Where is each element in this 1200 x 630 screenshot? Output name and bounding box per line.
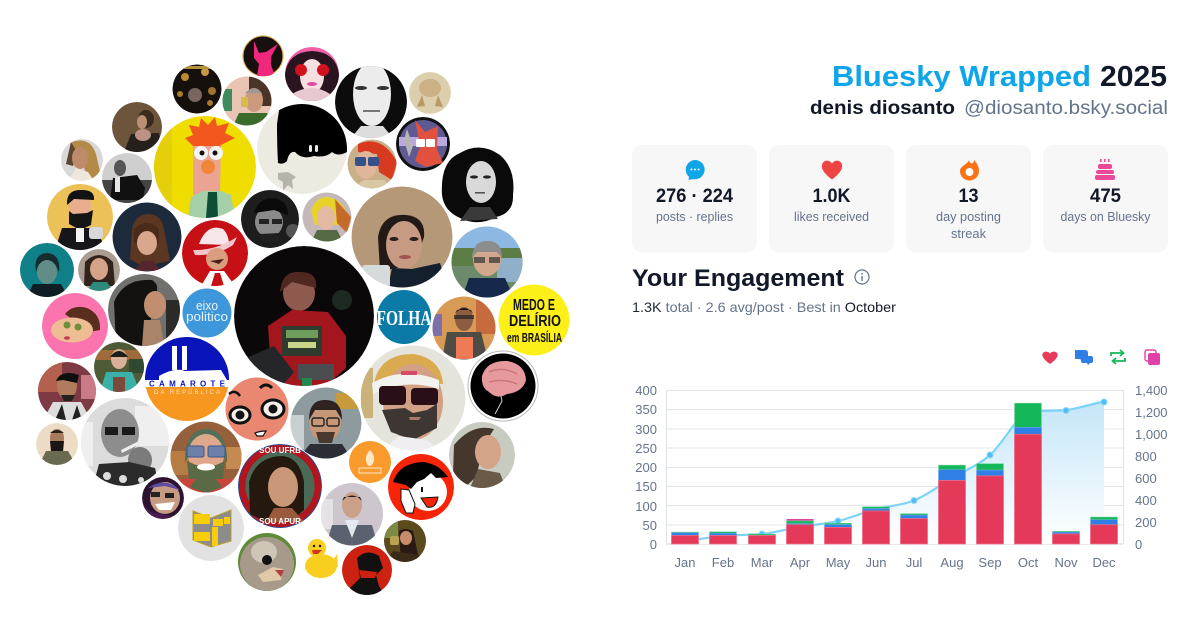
avatar: bald bearded man [36, 423, 78, 465]
stat card: likes received [769, 145, 894, 252]
month labels: Jun [866, 555, 886, 570]
avatar: pink cartoon [42, 293, 108, 359]
stat card: day posting streak: streak [951, 226, 986, 241]
avatar: Folha logo [376, 290, 432, 344]
avatar: black and white woman [335, 62, 407, 138]
avatar: rubber duck [305, 539, 338, 578]
avatar: greyscale smoking man [81, 398, 169, 486]
avatar: woman with wavy hair [449, 422, 515, 488]
icon: chat bubble [686, 160, 705, 180]
heading: Your Engagement: Your Engagement [632, 265, 844, 292]
month labels: Apr [790, 555, 811, 570]
title: Bluesky Wrapped [832, 61, 1091, 93]
right axis labels: 1,400 [1135, 383, 1168, 398]
left axis labels: 150 [635, 479, 657, 494]
icon: cake [1095, 159, 1115, 180]
month labels: Dec [1092, 555, 1116, 570]
chart legend [1042, 350, 1160, 365]
cumulative area [685, 402, 1104, 544]
avatar: woman at night [384, 520, 426, 562]
avatar: Folha logo: FOLHA [376, 306, 432, 330]
avatar: red hair and blue glasses [348, 140, 397, 188]
avatar bubble cluster [20, 36, 570, 595]
avatar: suited man [321, 483, 383, 546]
avatar: SOU UFRB SOU APUR [238, 444, 322, 528]
avatar: man with beer [222, 76, 273, 126]
icon: info [855, 270, 869, 284]
stat card: days on Bluesky: days on Bluesky [1060, 209, 1151, 224]
stat card: day posting streak: 13 [958, 186, 978, 207]
avatar: Camarote da Republica logo: DA REPÚBLICA [154, 389, 220, 396]
left axis labels: 200 [635, 460, 657, 475]
stat card: likes received: likes received [794, 209, 869, 224]
stat card: days on Bluesky [1043, 145, 1168, 252]
avatar: heart glasses cartoon [285, 47, 339, 101]
month labels: Mar [751, 555, 774, 570]
user name and handle: @diosanto.bsky.social [964, 98, 1168, 119]
month labels [675, 555, 1116, 570]
month labels: Aug [940, 555, 964, 570]
month labels: Nov [1054, 555, 1078, 570]
right axis labels: 600 [1135, 471, 1157, 486]
right axis labels: 200 [1135, 515, 1157, 530]
month labels: Sep [978, 555, 1002, 570]
avatar: SOU UFRB SOU APUR: SOU APUR [259, 517, 301, 526]
month labels: Jan [675, 555, 695, 570]
avatar: red cartoon character [388, 454, 454, 520]
avatar: woman with bookshelf [94, 342, 144, 392]
icon: likes legend [1042, 352, 1058, 364]
avatar: purple tinted man [142, 477, 184, 519]
right axis labels: 1,200 [1135, 405, 1168, 420]
avatar: golden lights [172, 64, 222, 114]
avatar: koala [238, 532, 296, 592]
right axis labels: 0 [1135, 537, 1142, 552]
avatar: woman with dark bangs [112, 202, 182, 272]
avatar: curly hair smiling [78, 249, 120, 291]
right axis labels: 400 [1135, 493, 1157, 508]
avatar: headband and sunglasses man [360, 346, 466, 450]
line markers [759, 399, 1107, 537]
avatar: woman selfie on tan wall [352, 186, 452, 288]
stat card: day posting streak [906, 145, 1031, 252]
avatar: man with glasses and lake [451, 226, 523, 298]
avatar: parchment sketch [409, 72, 451, 114]
icon: heart [822, 161, 842, 180]
right axis labels: 800 [1135, 449, 1157, 464]
stat card: day posting streak: day posting [936, 209, 1001, 224]
engagement summary: 1.3K total · 2.6 avg/post · Best in October [632, 299, 896, 315]
right axis labels: 1,000 [1135, 427, 1168, 442]
avatar: man with blue glasses and beard [170, 421, 242, 493]
avatar: Camarote da Republica logo: CAMAROTE [149, 380, 226, 388]
avatar: red mask illustration [342, 545, 392, 595]
stacked bars [672, 403, 1118, 544]
avatar: eixo politico logo [182, 288, 232, 338]
month labels: May [826, 555, 851, 570]
icon: replies legend [1075, 350, 1093, 365]
icon: quotes legend [1145, 350, 1160, 365]
avatar: blonde woman [61, 139, 103, 181]
title: 2025 [1100, 61, 1167, 93]
stat card: days on Bluesky: 475 [1090, 186, 1121, 207]
stat card: posts and replies: 276 · 224 [656, 186, 733, 207]
avatar: black and cream illustration [257, 104, 347, 194]
avatar: eixo politico logo: politico [186, 309, 228, 324]
avatar: eixo politico logo: eixo [196, 298, 218, 313]
avatar: bearded man cartoon [47, 184, 113, 250]
stat card: posts and replies [632, 145, 757, 252]
user name and handle: denis diosanto [810, 98, 955, 119]
left axis labels: 0 [650, 537, 657, 552]
left axis labels [635, 383, 657, 552]
avatar: yellow book logo [178, 495, 244, 561]
avatar: red fox cartoon [396, 117, 450, 171]
left axis labels: 300 [635, 422, 657, 437]
avatar: Medo e Delirio em Brasilia [498, 284, 570, 356]
chart grid [666, 390, 1124, 544]
avatar: Medo e Delirio em Brasilia: DELÍRIO [509, 311, 561, 330]
engagement chart [635, 383, 1168, 570]
avatar: curly hair woman greyscale [442, 147, 513, 222]
avatar: curly haired woman [108, 274, 180, 346]
avatar: yellow and orange hair [302, 192, 352, 242]
avatar: red hat cartoon [182, 220, 248, 286]
cumulative line [685, 402, 1104, 541]
avatar: main profile photo [234, 246, 374, 386]
avatar: glasses man with striped background [290, 388, 362, 459]
avatar: orange logo [349, 441, 391, 483]
avatar: Camarote da Republica logo [145, 337, 229, 421]
left axis labels: 50 [643, 518, 657, 533]
left axis labels: 250 [635, 441, 657, 456]
avatar: Medo e Delirio em Brasilia: MEDO E [513, 297, 555, 314]
right axis labels [1135, 383, 1168, 552]
left axis labels: 350 [635, 402, 657, 417]
avatar: greyscale man with glasses [241, 190, 300, 248]
avatar: black and white man [102, 153, 152, 203]
avatar: pink brain on black [468, 351, 538, 421]
month labels: Oct [1018, 555, 1038, 570]
month labels: Jul [906, 555, 922, 570]
avatar: man with tattoo and posters [38, 362, 96, 420]
avatar: Medo e Delirio em Brasilia: em BRASÍLIA [507, 330, 562, 345]
avatar: pink bunny [242, 36, 284, 76]
icon: reposts legend [1111, 350, 1125, 364]
avatar: beaker muppet [154, 116, 256, 218]
month labels: Feb [712, 555, 734, 570]
stat card: likes received: 1.0K [812, 186, 851, 207]
left axis labels: 400 [635, 383, 657, 398]
stat card: posts and replies: posts · replies [656, 209, 733, 224]
avatar: teal portrait [20, 243, 74, 297]
avatar: woman with scarf on brown background [112, 102, 162, 152]
avatar: man holding book [432, 296, 496, 360]
avatar: salmon cartoon face [226, 378, 288, 440]
icon: flame [960, 160, 979, 180]
left axis labels: 100 [635, 499, 657, 514]
avatar: SOU UFRB SOU APUR: SOU UFRB [259, 446, 301, 455]
user name and handle [810, 98, 1168, 119]
